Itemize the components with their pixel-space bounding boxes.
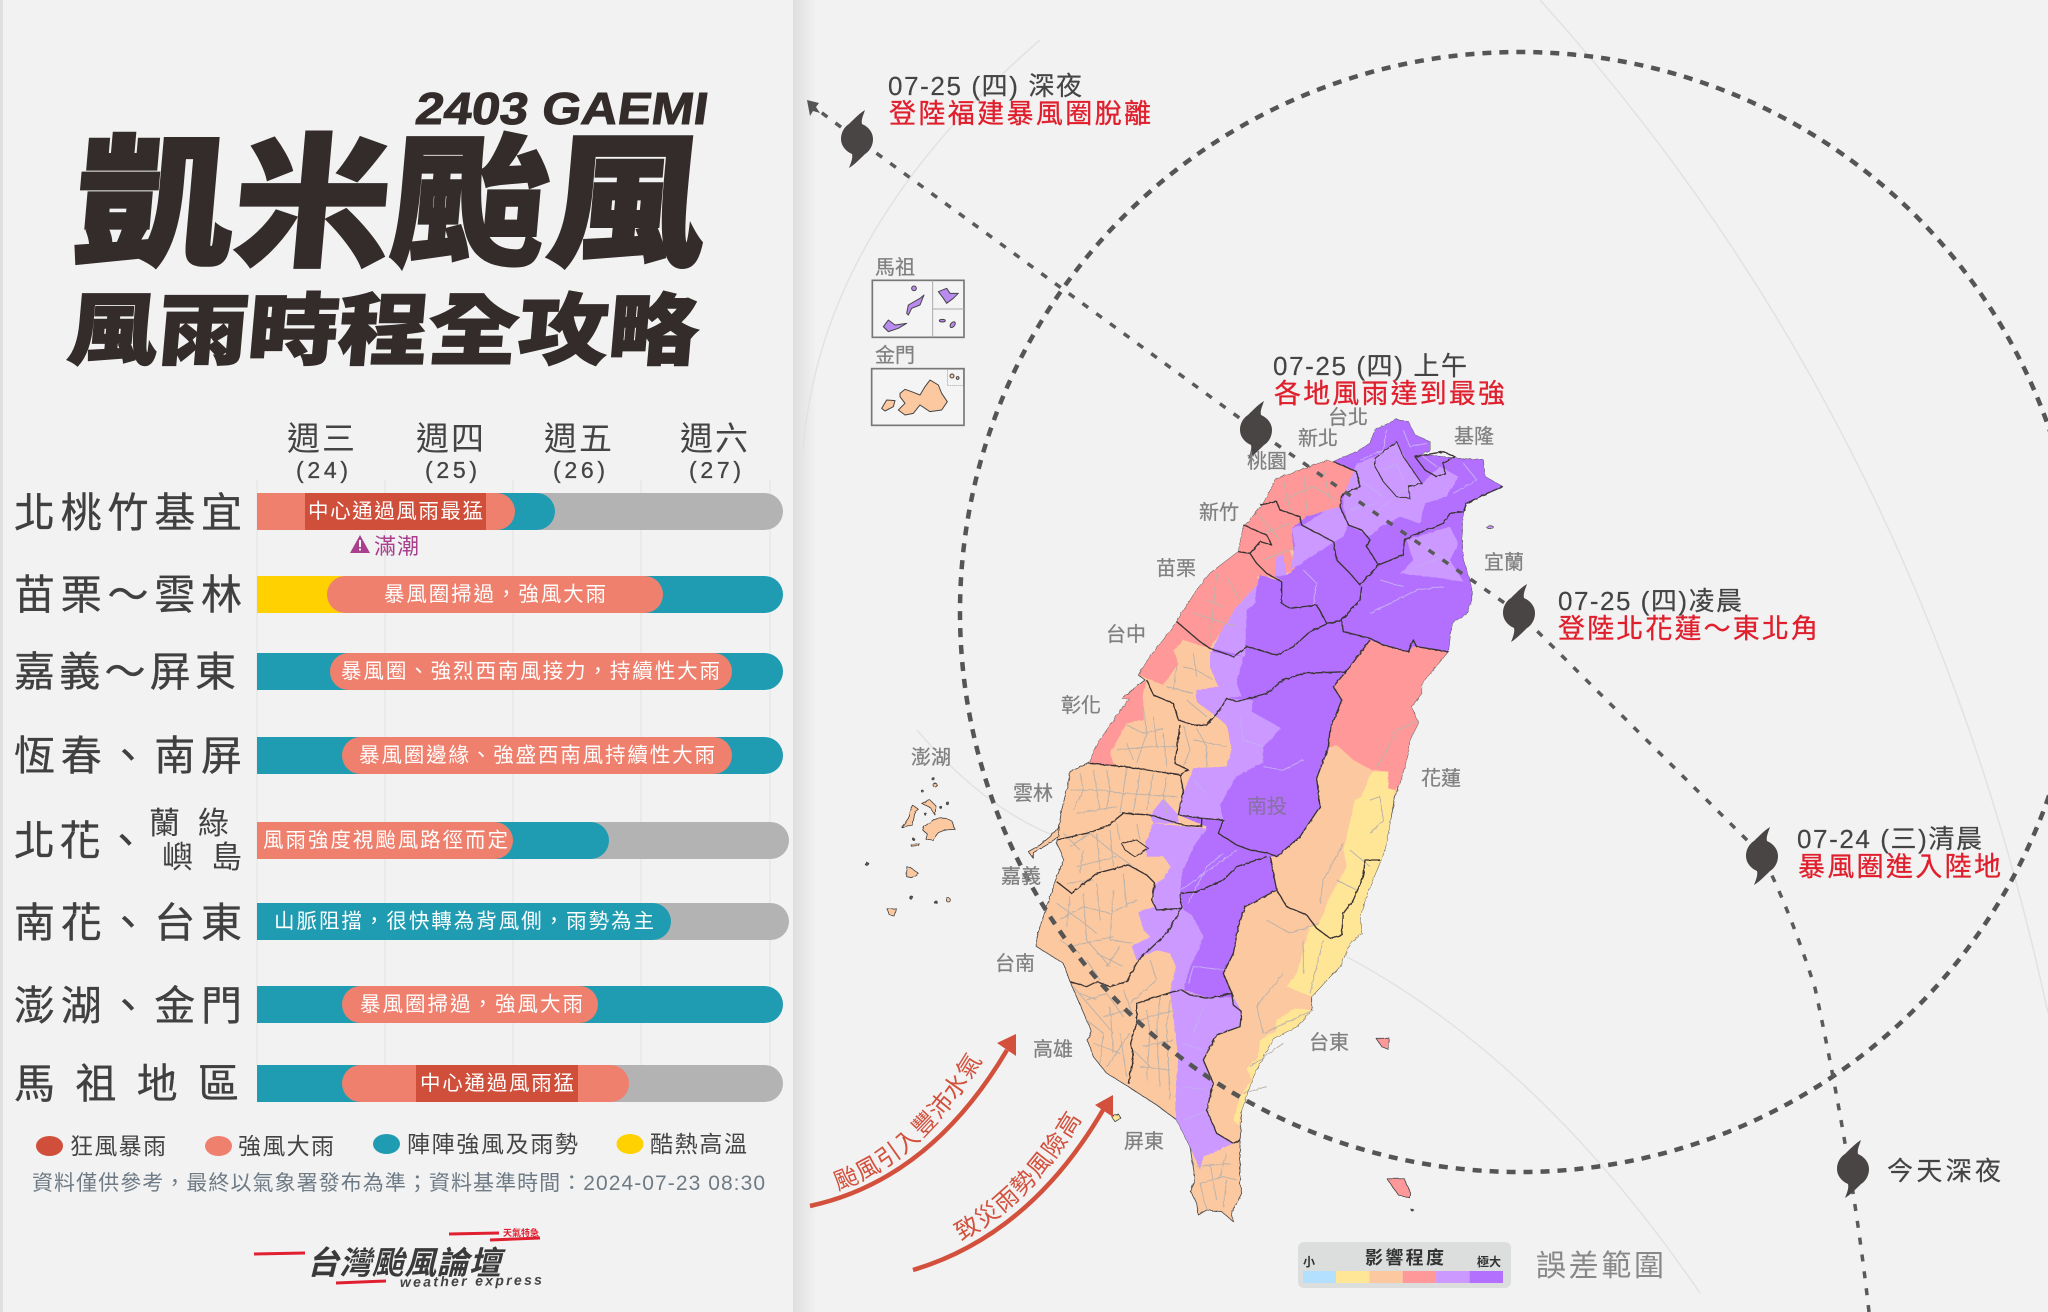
callout: Thursday morning: 07-25 (四) 上午: [1273, 351, 1467, 381]
high tide warning: 滿潮: [374, 534, 419, 559]
county labels: 花蓮: [1421, 767, 1461, 790]
callout: Thursday morning: [1273, 351, 1505, 409]
callout: Thursday early morning: 登陸北花蓮～東北角: [1558, 614, 1818, 644]
impact level legend: 小: [1303, 1255, 1315, 1269]
row: north Taoyuan Hsinchu Keelung Yilan: 北桃竹基宜: [14, 490, 242, 536]
arrow: moisture inflow: 颱風引入豐沛水氣: [833, 1052, 983, 1192]
county labels: 高雄: [1033, 1038, 1073, 1061]
county labels: 新北: [1298, 427, 1338, 450]
county labels: 台中: [1106, 623, 1146, 646]
day headers: 週三: [287, 420, 355, 457]
severe impact purple: north and central mountains: [1178, 419, 1503, 1000]
row: Penghu and Kinmen: 暴風圈掃過，強風大雨: [360, 993, 583, 1016]
county labels: 桃園: [1247, 450, 1287, 473]
logo: [254, 1227, 542, 1290]
row: Chiayi to Pingtung: 暴風圈、強烈西南風接力，持續性大雨: [341, 659, 720, 683]
county labels: 台南: [995, 952, 1035, 975]
very high impact light purple patches: [1132, 442, 1463, 1170]
callout: Thursday early morning: [1558, 586, 1818, 644]
row: Penghu and Kinmen: 澎湖、金門: [14, 983, 242, 1029]
row: Hengchun and south Pingtung: [14, 733, 783, 779]
row: south Hualien and Taitung: 南花、台東: [14, 900, 242, 946]
county labels: 基隆: [1454, 425, 1494, 448]
data note: 資料僅供參考，最終以氣象署發布為準；資料基準時間：2024-07-23 08:30: [32, 1172, 765, 1195]
day headers: 週五: [544, 420, 612, 457]
callout: Wednesday morning: [1797, 824, 2001, 882]
row: Matsu: 馬祖地區: [14, 1061, 239, 1107]
row: south Hualien and Taitung: 山脈阻擋，很快轉為背風側，雨勢為主: [274, 910, 654, 933]
impact level legend: [1298, 1242, 1511, 1288]
row: Hengchun and south Pingtung: 暴風圈邊緣、強盛西南風持續性大雨: [359, 743, 715, 767]
inset label: Kinmen: 金門: [875, 344, 915, 367]
day headers: (27): [689, 457, 741, 483]
row: north Hualien and Lanyu Green Island: 風雨強度視颱風路徑而定: [263, 829, 508, 852]
typhoon track: [818, 110, 1869, 1312]
county labels: 屏東: [1124, 1130, 1164, 1153]
callout: Thursday late night: 登陸福建暴風圈脫離: [889, 99, 1151, 129]
day headers: (26): [553, 457, 605, 483]
error range label: 誤差範圍: [1536, 1250, 1664, 1283]
weather legend: [36, 1131, 747, 1159]
moderate impact yellow: east coast: [1287, 772, 1395, 997]
county labels: 嘉義: [1001, 865, 1041, 888]
row: north Hualien and Lanyu Green Island: 蘭綠: [149, 806, 229, 841]
day headers: 週六: [680, 420, 748, 457]
icon: typhoon position, Wednesday morning: [1746, 827, 1778, 885]
callout: Wednesday morning: 07-24 (三)清晨: [1797, 824, 1982, 854]
county labels: 苗栗: [1156, 557, 1196, 580]
offshore islands: Guishan, Green Island, Orchid Island, Liuqiu: [1112, 525, 1493, 1211]
inset maps: Matsu and Kinmen: [872, 256, 964, 425]
callout: tonight: 今天深夜: [1887, 1156, 2001, 1186]
township boundaries: [1057, 467, 1418, 1210]
high impact pink: Changhua coast: [1088, 680, 1147, 767]
day headers: 週四: [416, 420, 484, 457]
county labels: 台北: [1328, 406, 1368, 429]
row: north Hualien and Lanyu Green Island: 嶼島: [162, 840, 242, 875]
track arrowhead: [807, 100, 820, 116]
arrow: disaster rain risk: [912, 1095, 1113, 1272]
row: north Hualien and Lanyu Green Island: 北花、: [14, 818, 146, 864]
row: Hengchun and south Pingtung: 恆春、南屏: [14, 733, 242, 779]
county labels: 宜蘭: [1484, 551, 1524, 574]
row: north Taoyuan Hsinchu Keelung Yilan: 中心通過風雨最猛: [308, 500, 483, 523]
main island base: [1037, 419, 1503, 1222]
row: north Taoyuan Hsinchu Keelung Yilan: [14, 490, 783, 559]
row: south Hualien and Taitung: [14, 900, 789, 946]
weather legend: 狂風暴雨: [70, 1133, 166, 1159]
Penghu islands: [866, 778, 1059, 916]
map of Taiwan: [1037, 419, 1503, 1222]
inset frame: Kinmen: [872, 369, 964, 425]
row: Matsu: [14, 1061, 783, 1107]
icon: typhoon position, Thursday early morning: [1503, 584, 1535, 642]
storm code: 2403 GAEMI: [413, 83, 712, 134]
title block: [64, 83, 716, 381]
callout: Wednesday morning: 暴風圈進入陸地: [1798, 852, 2001, 882]
high impact pink: north Hualien: [1330, 640, 1448, 790]
subtitle: 風雨時程全攻略: [64, 267, 704, 381]
weather legend: 陣陣強風及雨勢: [407, 1131, 578, 1157]
logo: 台灣颱風論壇: [307, 1238, 506, 1284]
county labels: 新竹: [1199, 501, 1239, 524]
impact level legend: 極大: [1477, 1254, 1501, 1269]
county labels: 台東: [1309, 1031, 1349, 1054]
impact level legend: 影響程度: [1365, 1247, 1444, 1268]
icon: typhoon position, Thursday morning: [1240, 401, 1272, 459]
arrow: disaster rain risk: 致災雨勢風險高: [952, 1110, 1082, 1241]
day headers: (24): [296, 457, 348, 483]
thin outer error arcs: [803, 0, 2048, 1293]
row: Miaoli to Yunlin: [14, 572, 783, 618]
county labels: 南投: [1247, 795, 1287, 818]
callout: Thursday morning: 各地風雨達到最強: [1274, 379, 1505, 409]
row: Chiayi to Pingtung: [14, 649, 783, 695]
inset label: Matsu: 馬祖: [875, 256, 915, 279]
row: north Hualien and Lanyu Green Island: [14, 806, 789, 875]
arrow: moisture inflow: [810, 1034, 1016, 1208]
row: Miaoli to Yunlin: 暴風圈掃過，強風大雨: [384, 583, 606, 606]
county labels: [911, 406, 1524, 1153]
icon: typhoon position, Thursday late night: [841, 110, 873, 168]
callout: Thursday early morning: 07-25 (四)凌晨: [1558, 586, 1742, 616]
logo: weather express: [400, 1272, 542, 1290]
callout: Thursday late night: [888, 71, 1151, 129]
main title: 凱米颱風: [68, 89, 716, 296]
day headers: [287, 420, 748, 483]
county labels: 雲林: [1013, 782, 1053, 805]
weather legend: 強風大雨: [238, 1133, 334, 1159]
row: Matsu: 中心通過風雨猛: [420, 1072, 574, 1095]
logo: 天氣特急: [503, 1227, 539, 1238]
row: Miaoli to Yunlin: 苗栗～雲林: [14, 572, 242, 618]
error range circle: [960, 52, 2048, 1172]
callout: Thursday late night: 07-25 (四) 深夜: [888, 71, 1082, 101]
high impact pink: Taoyuan to Taichung coast: [1138, 461, 1360, 685]
county labels: 澎湖: [911, 746, 951, 769]
county labels: 彰化: [1061, 694, 1101, 717]
inset frame: Matsu: [872, 280, 964, 337]
row: Chiayi to Pingtung: 嘉義～屏東: [14, 649, 236, 695]
grid lines: [257, 480, 770, 1066]
row: Penghu and Kinmen: [14, 983, 783, 1029]
high tide warning: [350, 534, 419, 559]
weather legend: 酷熱高溫: [650, 1131, 747, 1157]
icon: typhoon position, tonight: [1837, 1140, 1869, 1198]
county boundaries: [1057, 442, 1503, 1143]
day headers: (25): [425, 457, 477, 483]
